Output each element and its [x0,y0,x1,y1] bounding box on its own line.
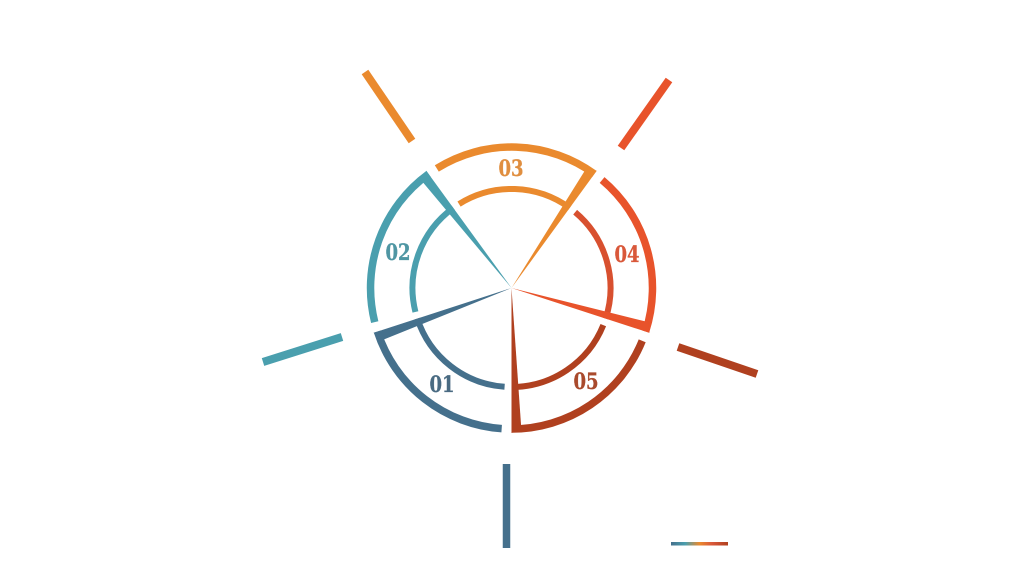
label: 01: 01 [429,371,455,397]
panel: segment 04 [512,164,690,333]
legend: gradient mini bar [671,542,728,546]
label: 04: 04 [614,241,640,267]
panel: segment 05 [512,288,642,433]
bar: teal ray [263,337,342,362]
label: 05: 05 [573,368,599,394]
bar: dark red ray [678,347,757,374]
label: 02: 02 [385,239,411,265]
bar: blue ray [503,464,510,548]
bar: red-orange ray [621,80,669,148]
bar: orange ray [365,72,412,141]
panel: segment 03 [406,94,597,288]
label: 03: 03 [498,155,524,181]
panel: segment 02 [321,171,512,365]
panel: segment 01 [374,288,552,457]
